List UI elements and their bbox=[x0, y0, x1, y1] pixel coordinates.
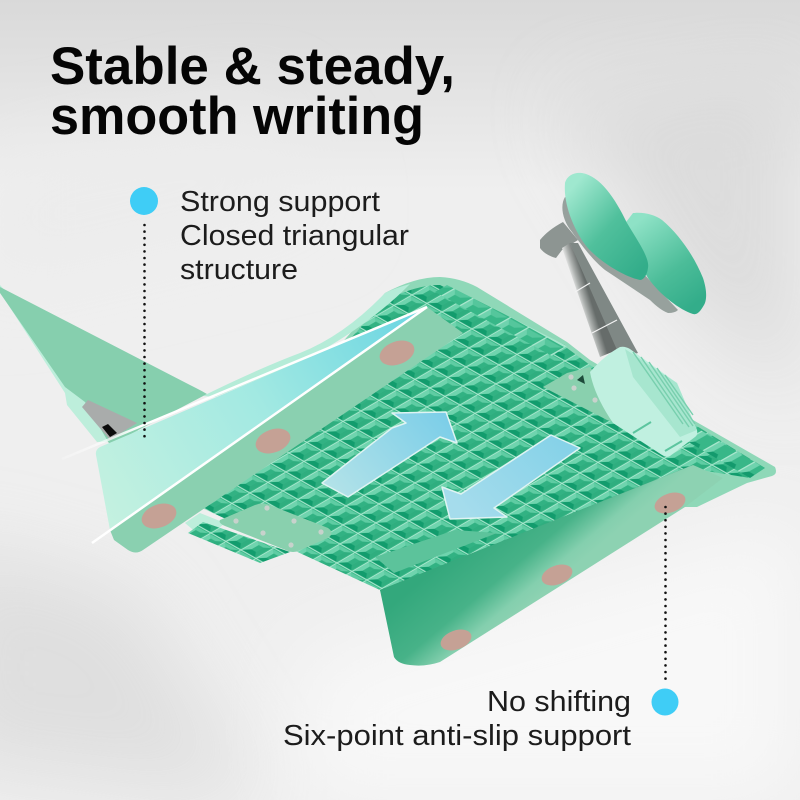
foot pad bbox=[438, 626, 474, 654]
callout text: Six-point anti-slip support bbox=[283, 720, 631, 752]
marker dot bbox=[652, 688, 678, 716]
callout: no shifting bbox=[283, 507, 678, 752]
front right support leg bbox=[380, 465, 723, 666]
front left support with highlighted triangle bbox=[62, 307, 463, 552]
table underside grid bbox=[200, 277, 776, 595]
foot pad bbox=[252, 424, 294, 458]
foot pad bbox=[138, 499, 180, 533]
foot pad bbox=[539, 561, 575, 589]
pedal block bbox=[590, 347, 697, 457]
foot pad bbox=[376, 336, 418, 370]
dotted leader bbox=[664, 507, 667, 681]
white highlight lines bbox=[62, 307, 427, 543]
title bbox=[50, 37, 455, 146]
foot pad bbox=[652, 489, 688, 517]
right mounting plate under pedal bbox=[543, 367, 633, 427]
mounting plate bbox=[220, 504, 332, 552]
callout text: No shifting bbox=[487, 686, 631, 718]
back left panel bbox=[0, 285, 207, 445]
blue arrow: backward bbox=[442, 435, 580, 519]
marker dot bbox=[130, 187, 158, 215]
blue arrow: forward bbox=[322, 412, 457, 497]
callout text bbox=[180, 186, 409, 286]
title: Stable & steady, bbox=[50, 37, 455, 96]
callout text: Strong support bbox=[180, 186, 380, 218]
callout text bbox=[283, 686, 631, 752]
title: smooth writing bbox=[50, 87, 424, 146]
small lower grid block bbox=[185, 513, 290, 563]
callout text: Closed triangular bbox=[180, 220, 409, 252]
callout: strong support bbox=[130, 186, 409, 437]
callout text: structure bbox=[180, 254, 298, 286]
leg support arm and pads bbox=[540, 173, 706, 358]
dotted leader bbox=[143, 225, 146, 437]
table rim above left support bbox=[203, 284, 410, 397]
